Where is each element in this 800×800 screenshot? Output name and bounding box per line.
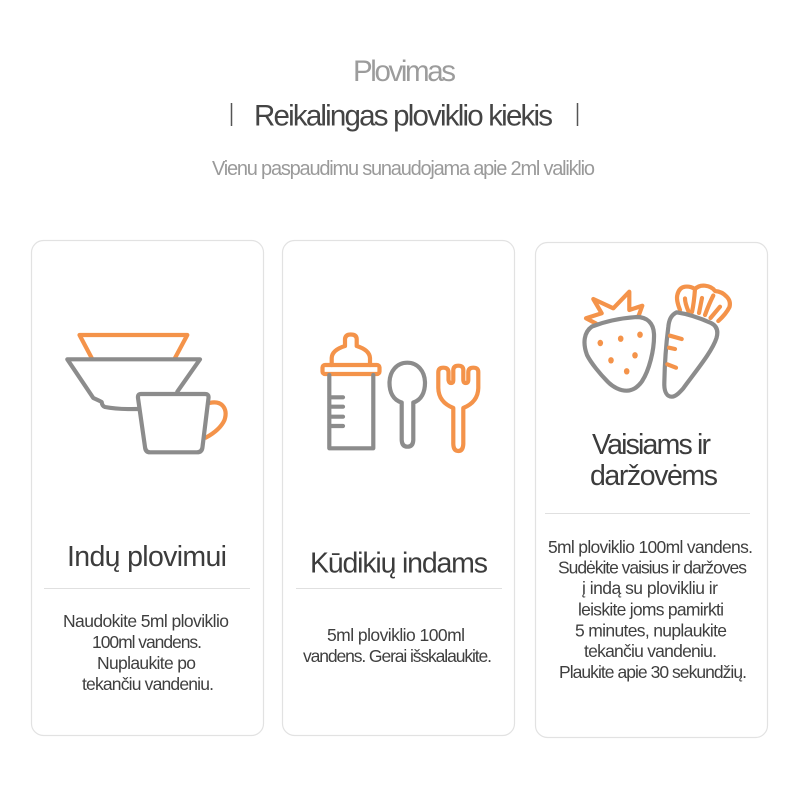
- panel text: [303, 625, 492, 666]
- panel title: Indų plovimui: [67, 541, 227, 573]
- icon: carrot: [664, 286, 730, 397]
- panel: dishes: [32, 240, 264, 736]
- panel title: Kūdikių indams: [310, 548, 488, 580]
- panel text: 5 minutes, nuplaukite: [575, 620, 727, 640]
- panel text: 100ml vandens.: [92, 632, 202, 652]
- icon: spoon: [390, 363, 425, 447]
- icon: fork: [438, 366, 478, 451]
- subtitle: Vienu paspaudimu sunaudojama apie 2ml valiklio: [212, 158, 595, 180]
- heading: Reikalingas ploviklio kiekis: [254, 100, 553, 132]
- panel text: 5ml ploviklio 100ml vandens.: [548, 537, 753, 557]
- panel text: į indą su plovikliu ir: [582, 578, 718, 598]
- section label: Plovimas: [353, 55, 456, 88]
- panel text: Naudokite 5ml ploviklio: [63, 611, 229, 631]
- panel text: Sudėkite vaisius ir daržoves: [558, 558, 747, 578]
- panel text: 5ml ploviklio 100ml: [327, 625, 465, 645]
- panel text: vandens. Gerai išskalaukite.: [303, 646, 492, 666]
- icon: baby bottle: [322, 334, 380, 448]
- panel: baby dishes: [282, 240, 514, 736]
- panel text: [548, 537, 753, 682]
- panel text: leiskite joms pamirkti: [578, 600, 724, 620]
- panel text: Nuplaukite po: [97, 653, 196, 673]
- panel text: tekančiu vandeniu.: [584, 641, 717, 661]
- panel text: [63, 611, 229, 694]
- panel: fruit and vegetables: [536, 242, 768, 738]
- panel text: Plaukite apie 30 sekundžių.: [559, 662, 747, 682]
- panel title: Vaisiams ir: [592, 429, 712, 461]
- panel title: [590, 429, 718, 492]
- panel title: daržovėms: [590, 460, 718, 492]
- icon: bowls and cup: [67, 335, 226, 452]
- panel text: tekančiu vandeniu.: [82, 674, 214, 694]
- icon: strawberry: [584, 292, 654, 391]
